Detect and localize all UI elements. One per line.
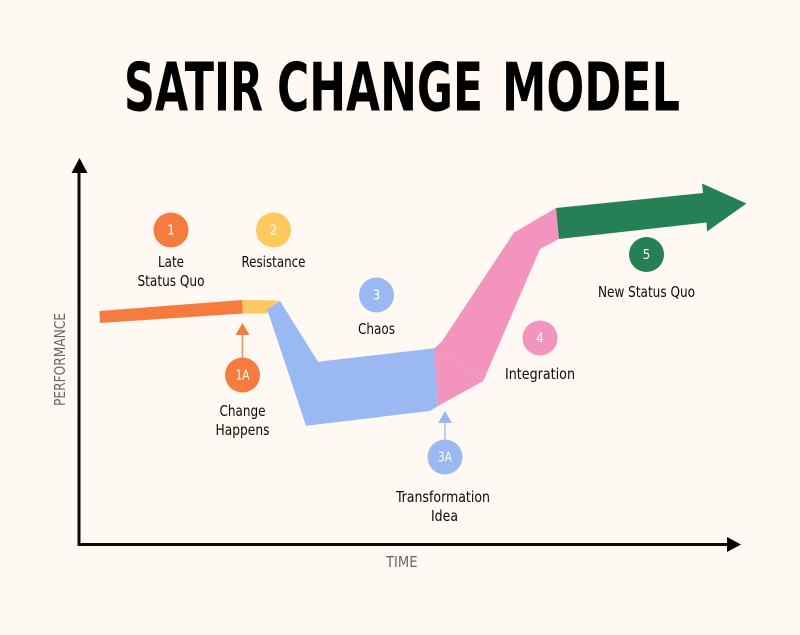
step 1A: change happens: Happens — [216, 421, 270, 439]
chart axes — [51, 158, 741, 571]
arrow: change happens — [236, 323, 250, 359]
step 5: new status quo: New Status Quo — [598, 283, 695, 301]
step 1A: change happens: 1A — [236, 368, 250, 384]
step 1: late status quo — [138, 212, 204, 290]
step 1A: change happens — [216, 323, 270, 439]
segment: new status quo arrow — [556, 184, 746, 239]
title: CHANGE — [277, 48, 483, 126]
step 3: chaos — [358, 278, 395, 338]
arrow: transformation idea — [438, 411, 452, 441]
segment: resistance — [242, 300, 280, 314]
segment: integration — [434, 208, 559, 406]
vertical axis — [72, 158, 88, 546]
axis label: performance: PERFORMANCE — [51, 313, 69, 406]
title — [124, 48, 680, 126]
step 4: integration — [505, 320, 575, 383]
segment: chaos — [267, 301, 438, 426]
step 1: late status quo: Late — [158, 253, 184, 271]
title: SATIR — [124, 48, 263, 126]
step 1: late status quo: Status Quo — [138, 272, 204, 290]
step 3A: transformation idea: 3A — [438, 450, 453, 466]
step 1A: change happens: Change — [220, 402, 266, 420]
step 3: chaos: Chaos — [358, 320, 395, 338]
step 3A: transformation idea: Transformation — [395, 488, 490, 506]
change curve — [100, 184, 746, 426]
step 4: integration: Integration — [505, 365, 575, 383]
axis label: time: TIME — [385, 553, 418, 571]
horizontal axis — [78, 537, 741, 552]
step 1: late status quo: 1 — [167, 222, 175, 238]
step 3A: transformation idea: Idea — [431, 507, 458, 525]
step 3: chaos: 3 — [373, 288, 380, 304]
step 5: new status quo: 5 — [643, 247, 650, 263]
segment: late status quo — [100, 300, 243, 323]
step 3A: transformation idea — [395, 411, 490, 525]
step 4: integration: 4 — [536, 330, 544, 346]
step 2: resistance: 2 — [270, 222, 277, 238]
step 2: resistance — [242, 212, 306, 271]
step 2: resistance: Resistance — [242, 253, 306, 271]
title: MODEL — [502, 48, 680, 126]
step 5: new status quo — [598, 237, 695, 301]
